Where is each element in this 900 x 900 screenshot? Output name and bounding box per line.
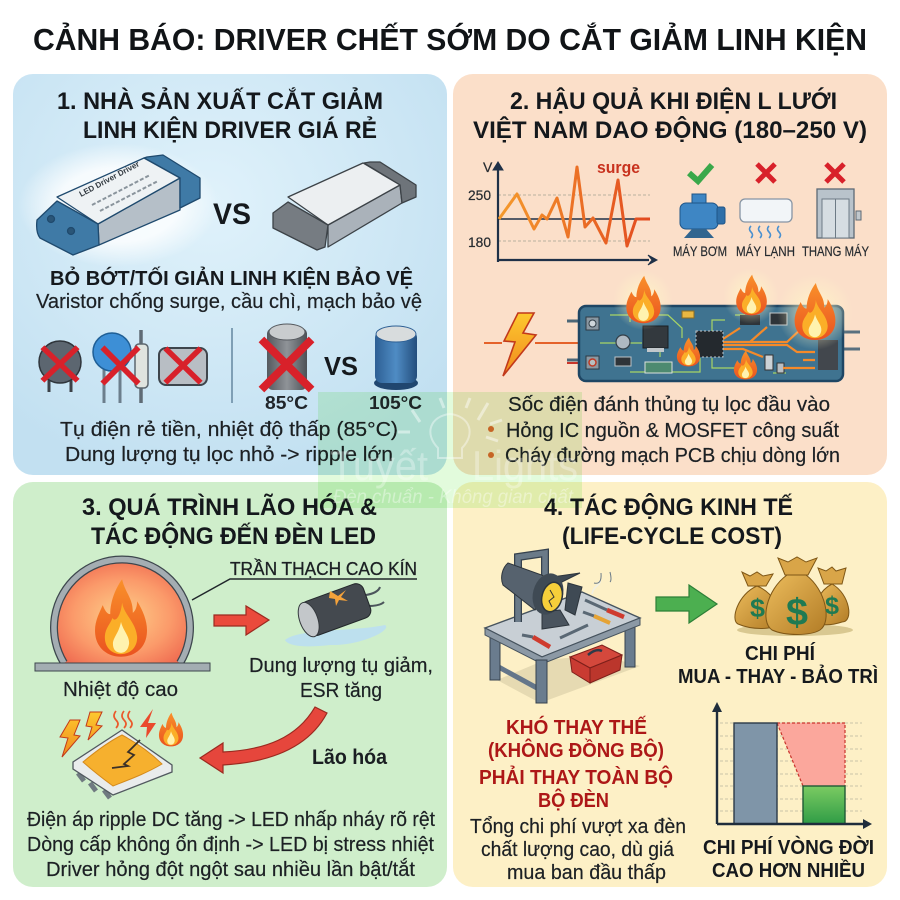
chart: grid voltage line: 250: [468, 187, 491, 203]
text: hard to replace: (KHÔNG ĐỒNG BỘ): [488, 738, 664, 762]
text: removed parts: Varistor chống surge, cầu chì, mạch bảo vệ: [36, 290, 422, 313]
heading: panel 4: 4. TÁC ĐỘNG KINH TẾ: [544, 493, 793, 521]
heading: panel 3: 3. QUÁ TRÌNH LÃO HÓA &: [82, 493, 377, 521]
icon: removed varistor, fuse and chip: [39, 330, 207, 403]
chart: grid voltage line: 180: [468, 234, 491, 250]
panel: manufacturer cuts components: [13, 74, 447, 475]
panel: aging process: [13, 482, 447, 887]
icon: elevator failed: THANG MÁY: [802, 243, 870, 259]
icon: 105°C capacitor: [369, 326, 422, 413]
icon: money bags: [735, 557, 853, 636]
chart: life-cycle cost bars: [712, 702, 872, 829]
arrow: heat to capacitor: [214, 606, 269, 635]
text: consequence list: Sốc điện đánh thủng tụ lọc đầu vào: [508, 393, 830, 416]
icon: cheap driver: [273, 162, 416, 250]
text: capacitor notes: Tụ điện rẻ tiền, nhiệt độ thấp (85°C): [60, 418, 398, 441]
text: consequence list: Hỏng IC nguồn & MOSFET công suất: [506, 419, 839, 442]
text: small VS: VS: [324, 351, 358, 381]
text: capacitor effect: Dung lượng tụ giảm,: [249, 654, 433, 677]
text: cost label: CHI PHÍ: [745, 642, 816, 665]
text: life-cycle cost conclusion: [703, 835, 874, 882]
text: total cost: Tổng chi phí vượt xa đèn: [470, 815, 686, 838]
heading: panel 1: LINH KIỆN DRIVER GIÁ RẺ: [83, 115, 377, 144]
icon: quality LED driver: LED Driver Driver: [78, 160, 141, 199]
icon: quality LED driver: [18, 143, 218, 267]
illustration: heat under sealed ceiling: Nhiệt độ cao: [63, 678, 178, 701]
text: LED effects: Dòng cấp không ổn định -> LED bị stress nhiệt: [27, 833, 434, 856]
watermark: Đèn chuẩn - Không gian chất: [333, 487, 574, 508]
heading: panel 1: 1. NHÀ SẢN XUẤT CẮT GIẢM: [57, 86, 383, 115]
panel: consequences: [453, 74, 887, 475]
text: total cost: [470, 815, 686, 884]
arrow: aging curve: [200, 707, 327, 773]
text: life-cycle cost conclusion: CAO HƠN NHIỀU: [712, 859, 865, 882]
text: capacitor effect: ESR tăng: [300, 679, 382, 702]
text: hard to replace: PHẢI THAY TOÀN BỘ: [479, 765, 673, 789]
text: hard to replace: [479, 715, 673, 812]
panel: economic impact: [453, 482, 887, 887]
text: consequence list: [488, 393, 840, 467]
text: LED effects: [27, 808, 435, 881]
chart: grid voltage line: [468, 159, 657, 265]
chart: grid voltage line: surge: [597, 159, 640, 177]
watermark: [318, 392, 582, 508]
icon: cracked LED chip: [60, 709, 183, 798]
watermark: Tuyết: [330, 442, 428, 489]
icon: AC failed: MÁY LẠNH: [736, 243, 795, 259]
icon: money bags: $: [786, 592, 808, 634]
icon: elevator failed: [802, 164, 870, 259]
text: capacitor notes: [60, 418, 398, 466]
arrow: toward cost: [656, 585, 717, 623]
illustration: heat under sealed ceiling: TRẦN THẠCH CAO KÍN: [230, 558, 417, 579]
icon: pump OK: [673, 165, 727, 259]
text: total cost: mua ban đầu thấp: [507, 861, 666, 884]
icon: money bags: $: [825, 592, 839, 620]
icon: pump OK: MÁY BƠM: [673, 243, 727, 259]
heading: panel 2: [473, 86, 867, 144]
text: hard to replace: KHÓ THAY THẾ: [506, 715, 647, 739]
icon: lightning surge: [484, 313, 580, 376]
text: hard to replace: BỘ ĐÈN: [538, 788, 609, 812]
heading: panel 1: [57, 86, 383, 144]
watermark: Lights: [472, 442, 578, 489]
illustration: workbench with failed light: [485, 553, 640, 703]
icon: 105°C capacitor: 105°C: [369, 393, 422, 413]
illustration: heat under sealed ceiling: [35, 558, 417, 701]
text: aging: Lão hóa: [312, 746, 387, 769]
text: LED effects: Driver hỏng đột ngột sau nhiều lần bật/tắt: [46, 858, 415, 881]
text: cost label: MUA - THAY - BẢO TRÌ: [678, 665, 878, 688]
text: consequence list: Cháy đường mạch PCB chịu dòng lớn: [505, 444, 840, 467]
icon: AC failed: [736, 164, 795, 259]
icon: damaged capacitor: [285, 581, 386, 646]
text: life-cycle cost conclusion: CHI PHÍ VÒNG ĐỜI: [703, 835, 874, 859]
heading: panel 2: 2. HẬU QUẢ KHI ĐIỆN L LƯỚI: [510, 86, 837, 115]
text: capacitor effect: [249, 654, 433, 702]
title: CẢNH BÁO: DRIVER CHẾT SỚM DO CẮT GIẢM LINH KIỆN: [33, 21, 867, 57]
text: LED effects: Điện áp ripple DC tăng -> LED nhấp nháy rõ rệt: [27, 808, 435, 831]
heading: panel 3: TÁC ĐỘNG ĐẾN ĐÈN LED: [91, 522, 376, 550]
illustration: burning circuit board: [567, 268, 860, 381]
text: total cost: chất lượng cao, dù giá: [481, 838, 675, 861]
heading: panel 4: (LIFE-CYCLE COST): [562, 523, 782, 550]
icon: 85°C capacitor crossed out: 85°C: [265, 393, 308, 413]
icon: 85°C capacitor crossed out: [261, 324, 312, 413]
heading: panel 4: [544, 493, 793, 550]
text: VS: VS: [213, 198, 251, 231]
text: cost label: [678, 642, 878, 688]
icon: money bags: $: [750, 593, 766, 623]
chart: grid voltage line: V: [483, 159, 493, 175]
heading: panel 2: VIỆT NAM DAO ĐỘNG (180–250 V): [473, 116, 867, 144]
heading: panel 3: [82, 493, 377, 550]
text: capacitor notes: Dung lượng tụ lọc nhỏ -> ripple lớn: [65, 443, 393, 466]
text: remove protection: BỎ BỚT/TỐI GIẢN LINH KIỆN BẢO VỆ: [50, 266, 413, 290]
